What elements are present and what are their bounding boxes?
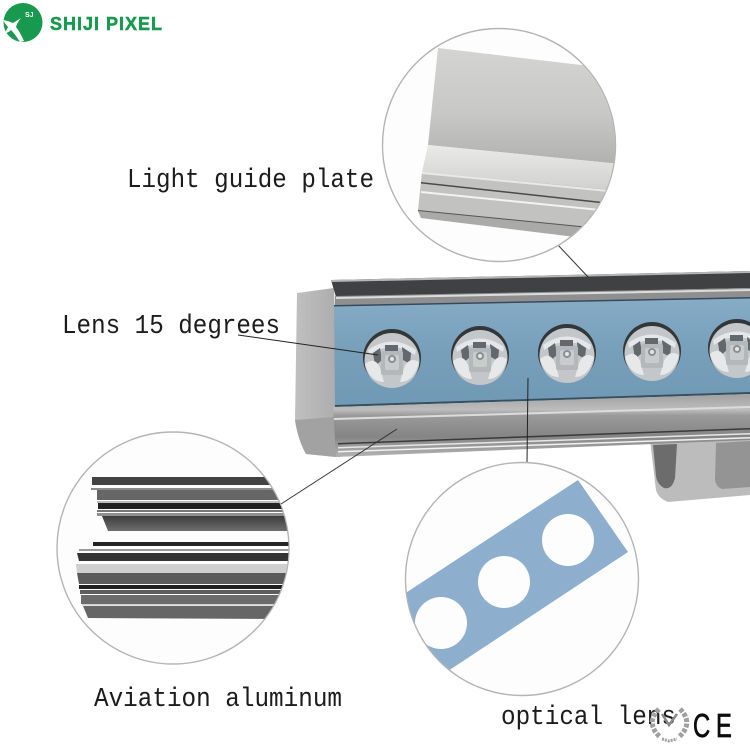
aluminium lower profile [333,394,750,457]
label: optical lens: optical lens [501,703,676,733]
logo icon: green circle with bird [3,3,42,42]
lens 4 [623,322,681,381]
end cap [295,288,340,457]
logo wordmark: SHIJI PIXEL [50,14,162,34]
panel: light guide plate detail circle [382,28,640,262]
blue plate with three holes [406,480,628,670]
icon: CE mark: CE [693,708,732,745]
lens 2 [451,326,509,385]
leader lines [238,244,589,504]
lens 5 [708,319,750,378]
logo [3,3,162,42]
logo icon: green circle with bird: SJ [25,12,34,19]
mounting bracket [650,436,750,502]
lens 3 [538,324,596,383]
LED lens row [363,319,750,388]
label: lens 15 degrees: Lens 15 degrees [62,312,280,342]
label: aviation aluminum: Aviation aluminum [94,685,342,715]
label: light guide plate: Light guide plate [127,166,374,196]
panel: optical lens detail circle [404,462,640,696]
top light strip [335,288,750,306]
blue optical lens panel [334,297,750,407]
lens 1 [363,329,421,388]
LED wall washer product [295,271,750,502]
top dark channel [331,271,750,297]
icon: laurel wreath badge [652,709,687,741]
panel: aviation aluminum detail circle [57,432,299,664]
